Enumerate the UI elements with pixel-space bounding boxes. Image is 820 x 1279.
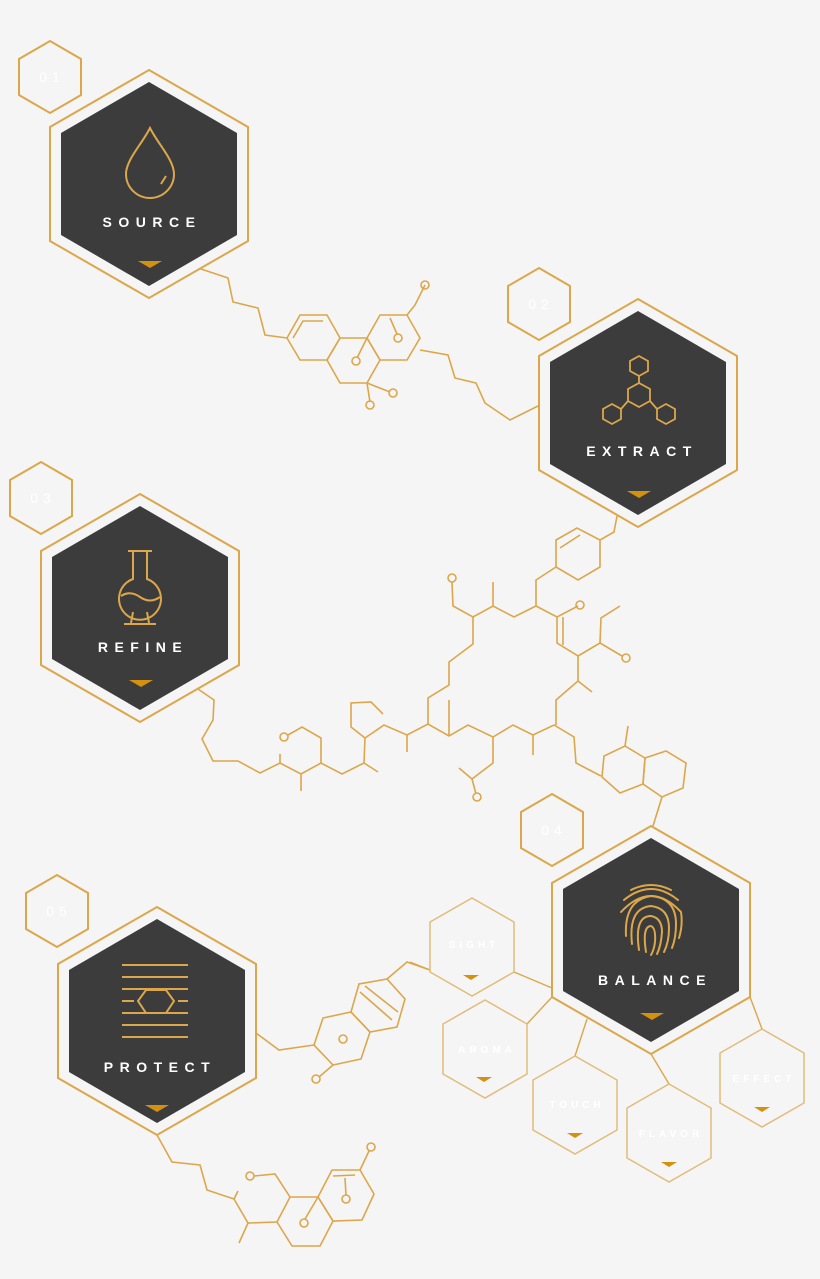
molecule: protect to sight — [256, 962, 430, 1083]
icon: flask — [119, 551, 161, 624]
sense hex: touch — [533, 1056, 617, 1154]
panel: refine — [41, 494, 239, 722]
connectors: balance to senses — [410, 962, 762, 1084]
number hex 02: 02 — [528, 296, 554, 312]
sense hex: aroma — [443, 1000, 527, 1098]
arrow — [640, 1013, 664, 1020]
label: protect: PROTECT — [104, 1059, 216, 1075]
sense hex: aroma: AROMA — [458, 1045, 516, 1056]
sense hex: effect: EFFECT — [733, 1074, 795, 1085]
panel: extract — [539, 299, 737, 527]
arrow — [627, 491, 651, 498]
sense hex: effect — [720, 1029, 804, 1127]
number hex 01: 01 — [39, 69, 65, 85]
number hex 01 — [19, 41, 81, 113]
panel: source — [50, 70, 248, 298]
panel: protect — [58, 907, 256, 1135]
label: refine: REFINE — [98, 639, 188, 655]
label: balance: BALANCE — [598, 972, 712, 988]
number hex 02 — [508, 268, 570, 340]
panel: balance — [552, 826, 750, 1054]
arrow — [145, 1105, 169, 1112]
number hex 05: 05 — [46, 903, 72, 919]
sense hex: sight: SIGHT — [449, 940, 499, 951]
sense hex: sight — [430, 898, 514, 996]
arrow — [129, 680, 153, 687]
number hex 05 — [26, 875, 88, 947]
sense hex: touch: TOUCH — [549, 1100, 605, 1111]
molecule: source to extract — [198, 268, 540, 420]
sense hex: flavor — [627, 1084, 711, 1182]
molecule: extract to balance — [198, 516, 686, 826]
icon: water drop — [126, 128, 174, 198]
number hex 03: 03 — [30, 490, 56, 506]
number hex 03 — [10, 462, 72, 534]
label: source: SOURCE — [103, 214, 201, 230]
icon: protective layers — [122, 965, 188, 1037]
label: extract: EXTRACT — [586, 443, 698, 459]
icon: molecule — [603, 356, 675, 424]
number hex 04 — [521, 794, 583, 866]
number hex 04: 04 — [541, 822, 567, 838]
arrow — [138, 261, 162, 268]
sense hex: flavor: FLAVOR — [639, 1129, 703, 1140]
icon: fingerprint — [621, 885, 682, 955]
molecule: bottom — [157, 1135, 375, 1246]
